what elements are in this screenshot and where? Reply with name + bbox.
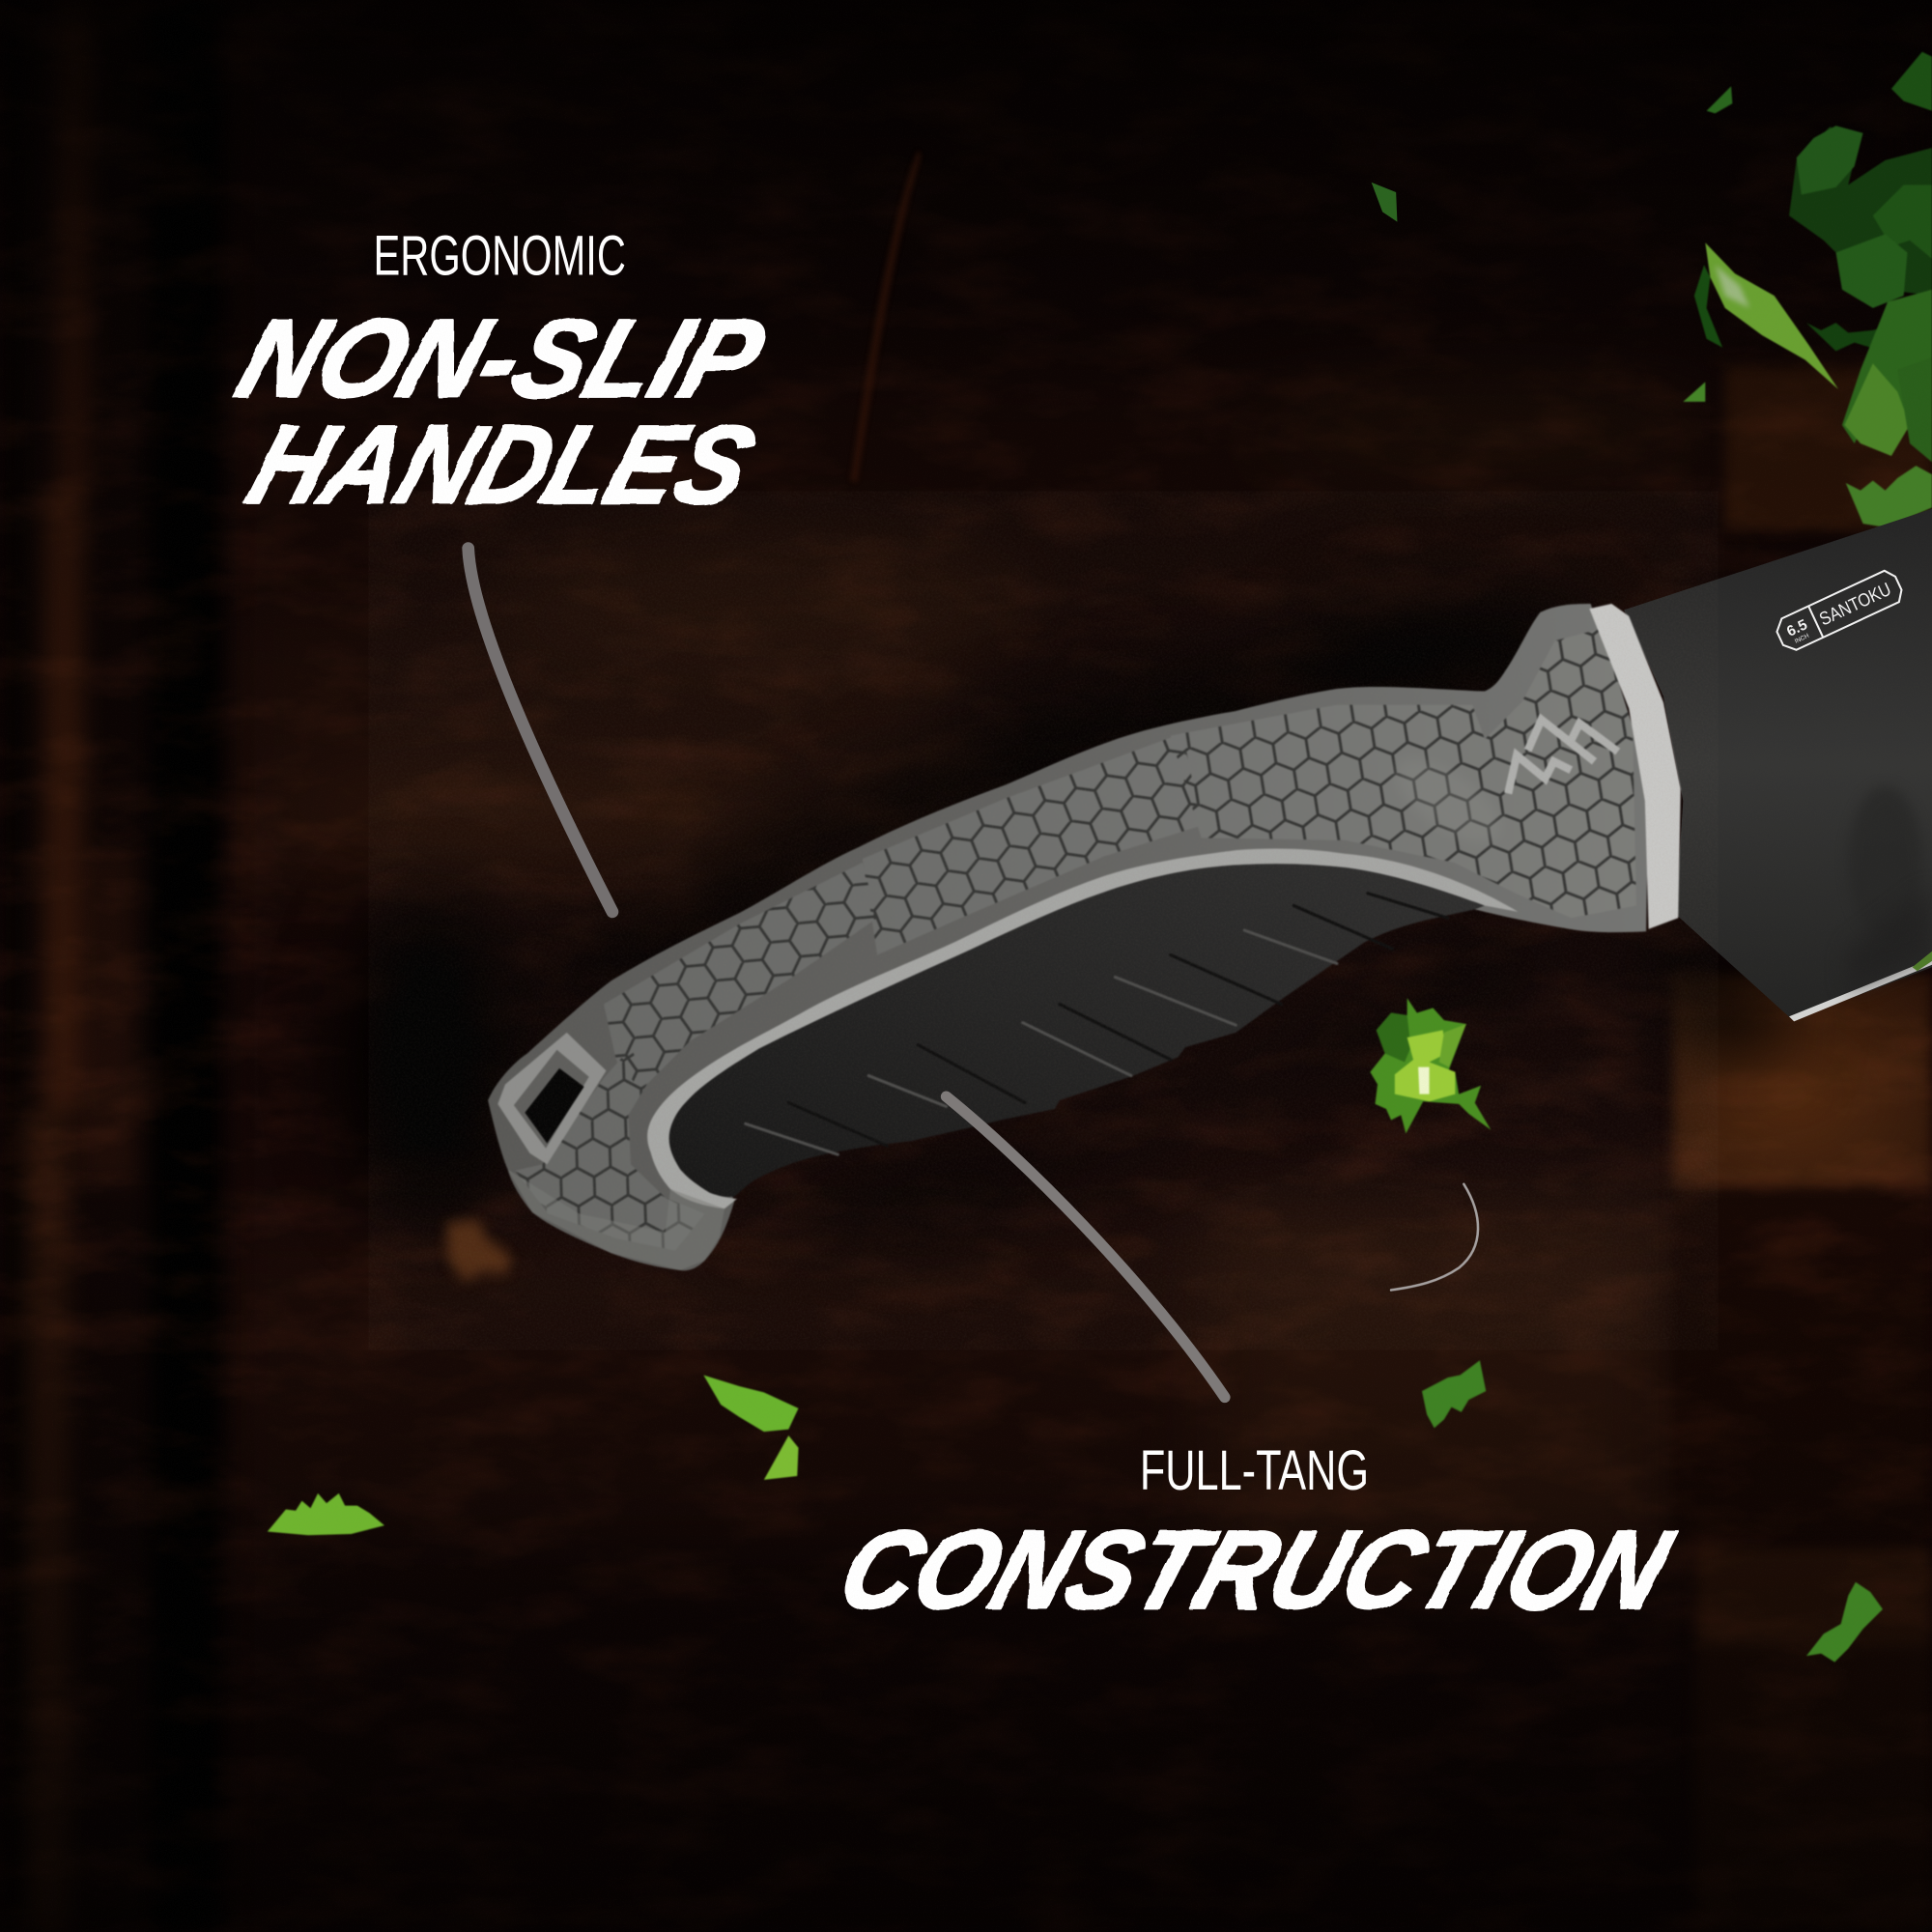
callout line to handle	[469, 549, 612, 912]
pale bolster guard	[1589, 604, 1681, 929]
callout: full-tang construction	[825, 1439, 1687, 1632]
blade edge highlight	[1789, 958, 1932, 1021]
callout line to grip	[947, 1096, 1225, 1397]
honeycomb texture	[515, 629, 1636, 1251]
parsley leaf, lower left	[268, 1493, 384, 1535]
logo on bolster	[1508, 720, 1618, 793]
black rubber grip	[669, 864, 1485, 1197]
callout: ergonomic non-slip handles	[224, 224, 779, 526]
handle grey body	[488, 604, 1649, 1270]
callout: ergonomic non-slip handles: NON-SLIP	[224, 296, 779, 420]
blade label: 6.5 inch santoku: SANTOKU	[1817, 580, 1894, 630]
parsley cluster, top right	[1683, 52, 1932, 527]
light patch on handle	[1381, 744, 1514, 859]
knife handle	[488, 604, 1681, 1270]
knot of lighter wood	[446, 1220, 511, 1282]
blade label: 6.5 inch santoku: INCH	[1794, 633, 1810, 645]
parsley leaf, bottom right	[1806, 1582, 1883, 1662]
callout: full-tang construction: CONSTRUCTION	[825, 1507, 1687, 1632]
grip ribs	[746, 894, 1448, 1154]
callout: ergonomic non-slip handles: ERGONOMIC	[373, 224, 626, 287]
handle grain	[488, 604, 1681, 1261]
blade label: 6.5 inch santoku	[1773, 568, 1906, 654]
black shadow around the handle	[345, 591, 1799, 1233]
lanyard hole	[497, 1033, 607, 1164]
knife blade	[1624, 509, 1932, 1021]
parsley leaf, lower right of centre	[1422, 1360, 1486, 1428]
callout: ergonomic non-slip handles: HANDLES	[235, 402, 768, 526]
shading along handle bottom	[508, 1169, 724, 1270]
parsley flake, top	[1372, 183, 1397, 222]
parsley piece beside the handle	[1370, 998, 1491, 1133]
callout: full-tang construction: FULL-TANG	[1140, 1439, 1369, 1502]
light grey trim band	[647, 849, 1518, 1208]
thin curved hair	[1391, 1184, 1478, 1290]
blade label: 6.5 inch santoku: 6.5	[1784, 616, 1810, 640]
parsley leaf, lower centre	[703, 1375, 799, 1480]
dark scratch in the wood	[850, 151, 922, 483]
